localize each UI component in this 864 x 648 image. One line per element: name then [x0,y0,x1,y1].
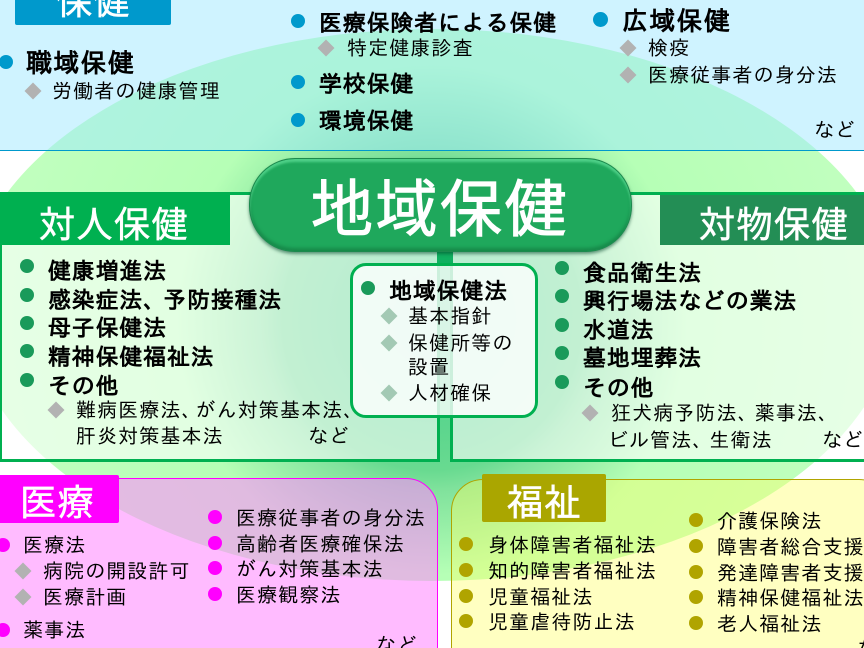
list: 地域保健法 [361,278,514,405]
panel: 対物保健 [450,192,864,462]
heading: 福祉 [482,474,606,522]
list: 対人保健 laws: その他 [48,373,119,399]
list: 地域保健法: 設置 [408,357,450,379]
panel: 福祉 [451,479,864,648]
list: 医療保険者による保健 [291,10,557,134]
list: 職域保健: 労働者の健康管理 [52,81,221,103]
title: 地域保健: 地域保健 [311,176,569,245]
list: 対物保健 laws: 狂犬病予防法、薬事法、 [611,403,835,425]
list: 地域保健法: 基本指針 [408,306,492,328]
panel: 医療 [0,478,438,648]
list: 対人保健 laws: など [308,426,350,448]
list: 職域保健 [0,48,221,103]
list: 医療 right: 医療従事者の身分法 [236,508,426,530]
list: 医療 right: 医療観察法 [236,585,342,607]
list: 職域保健: 職域保健 [26,48,135,78]
list: 広域保健: 広域保健 [622,6,731,36]
list: 対物保健 laws [555,260,864,452]
list: 対物保健 laws: 興行場法などの業法 [583,288,797,314]
list: 医療保険者による保健: 医療保険者による保健 [319,10,557,36]
list: 福祉 left [459,535,657,634]
list: 医療 left [0,535,191,642]
list: 福祉 right: 精神保健福祉法 [717,588,864,610]
heading: 医療 [0,475,119,523]
list: 医療 right: 高齢者医療確保法 [236,534,405,556]
list: 対人保健 laws: 健康増進法 [48,258,167,284]
panel: 保健 top [0,0,864,151]
list: 対人保健 laws [20,258,364,448]
list: 医療保険者による保健: 学校保健 [319,71,414,97]
list: 対物保健 laws: など [822,430,864,452]
note: など: など [814,120,856,142]
list: 広域保健 [593,6,838,87]
list: 医療保険者による保健: 環境保健 [319,108,414,134]
title: 地域保健 [249,158,632,252]
list: 福祉 right [689,511,864,636]
list: 対物保健 laws: その他 [583,375,654,401]
list: 対人保健 laws: 母子保健法 [48,315,167,341]
list: 福祉 left: 児童福祉法 [488,587,594,609]
list: 対人保健 laws: 肝炎対策基本法 [76,426,224,448]
list: 福祉 right: 老人福祉法 [717,614,822,636]
list: 広域保健: 医療従事者の身分法 [648,65,838,87]
heading: 対物保健: 対物保健 [699,204,849,245]
heading: 対人保健 [0,195,230,245]
heading: 保健 [15,0,171,25]
list: 福祉 left: 知的障害者福祉法 [488,561,657,583]
list: 医療 right: がん対策基本法 [236,559,384,581]
list: 地域保健法: 保健所等の [408,333,514,355]
list: 地域保健法: 地域保健法 [389,278,508,304]
list: 地域保健法: 人材確保 [408,383,492,405]
list: 対人保健 laws: 精神保健福祉法 [48,344,215,370]
list: 医療保険者による保健: 特定健康診査 [347,38,474,60]
panel: 対人保健 [0,192,440,462]
list: 広域保健: 検疫 [648,38,690,60]
heading: 医療: 医療 [20,482,95,523]
list: 医療 left: 医療計画 [43,587,127,609]
list: 対人保健 laws: 感染症法、予防接種法 [48,287,282,313]
list: 対物保健 laws: 水道法 [583,317,654,343]
list: 対物保健 laws: ビル管法、生衛法 [608,430,773,452]
list: 福祉 left: 児童虐待防止法 [488,612,636,634]
list: 医療 left: 医療法 [23,535,86,557]
list: 対物保健 laws: 食品衛生法 [583,260,702,286]
list: 対物保健 laws: 墓地埋葬法 [583,345,702,371]
heading: 対物保健 [660,195,864,245]
list: 対人保健 laws: 難病医療法、がん対策基本法、 [76,400,364,422]
connector stub [437,250,453,264]
heading: 対人保健: 対人保健 [39,204,189,245]
list: 医療 left: 病院の開設許可 [43,561,191,583]
list: 福祉 left: 身体障害者福祉法 [488,535,657,557]
panel: 地域保健法 [350,263,538,418]
list: 福祉 right: 介護保険法 [717,511,822,533]
list: 医療 right [208,508,426,607]
list: 医療 left: 薬事法 [23,620,86,642]
heading: 福祉: 福祉 [507,482,582,523]
